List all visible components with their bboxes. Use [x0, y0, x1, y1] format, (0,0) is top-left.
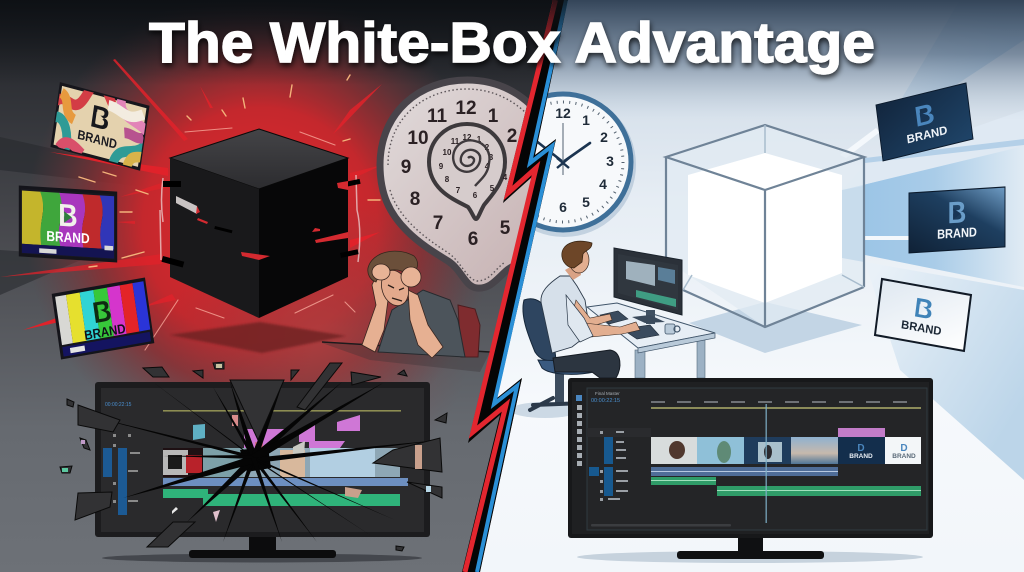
card: navy brand middle — [909, 187, 1005, 253]
clock numerals: 5 — [582, 194, 590, 210]
office chair — [523, 299, 595, 374]
stressed man at desk — [322, 251, 490, 372]
outer clock numerals: 11 — [427, 106, 447, 127]
inner clock numerals: 6 — [473, 191, 478, 200]
inner clock numerals: 2 — [485, 143, 490, 152]
outer clock numerals: 9 — [401, 157, 411, 178]
inner clock numerals: 12 — [463, 133, 472, 142]
inner clock numerals: 7 — [456, 186, 461, 195]
panel: white-box solution side — [470, 0, 1024, 572]
label: brand: BRAND — [46, 228, 90, 247]
label: brand: BRAND — [906, 124, 948, 147]
sparks around the black box — [79, 75, 380, 350]
inner clock numerals: 8 — [445, 175, 450, 184]
timeline: audio tracks — [163, 478, 408, 506]
icon: brand logo: B — [88, 99, 112, 138]
video clips: D — [900, 443, 908, 454]
outer clock numerals: 6 — [468, 229, 478, 250]
icon: brand logo: B — [913, 97, 936, 133]
outer clock numerals — [401, 98, 517, 250]
playhead — [766, 404, 767, 523]
track headers — [587, 428, 628, 501]
inner clock numerals: 5 — [490, 184, 495, 193]
timeline: left controls: 00:00:22:15 — [105, 402, 132, 408]
shirt — [541, 276, 590, 353]
outer clock numerals: 5 — [500, 218, 511, 239]
icon: brand logo: B — [90, 294, 114, 330]
timecode and sequence name — [591, 392, 620, 402]
label: brand: BRAND — [83, 321, 127, 343]
clock numerals: 6 — [559, 199, 567, 215]
video clips: BRAND — [892, 453, 916, 460]
timecode and sequence name: 00:00:22:15 — [591, 398, 620, 404]
audio tracks — [651, 467, 921, 496]
cube shadow — [689, 302, 862, 353]
red energy rays — [0, 59, 382, 330]
outer clock numerals: 2 — [507, 126, 517, 147]
label: brand: BRAND — [900, 319, 942, 338]
desktop monitor — [614, 248, 682, 324]
small screen shards with image fragments — [172, 415, 362, 522]
glitch lines around cube — [160, 175, 360, 262]
arms — [574, 300, 612, 324]
screen cracks radiating from impact — [90, 382, 440, 542]
label: brand: BRAND — [76, 127, 118, 152]
inner clock numerals — [439, 133, 508, 200]
desk — [587, 303, 715, 378]
head — [562, 241, 592, 280]
video clips — [651, 437, 921, 464]
outer clock numerals: 12 — [455, 98, 477, 119]
scrollbar — [591, 524, 731, 526]
clock numerals: 2 — [600, 129, 608, 145]
shadow under black box — [170, 322, 346, 353]
timeline: pink clips — [244, 415, 360, 448]
timecode and sequence name: Final Master — [595, 391, 620, 396]
card: white brand bottom — [875, 279, 971, 351]
inner clock numerals: 3 — [489, 153, 494, 162]
inner clock numerals: 4 — [503, 173, 508, 182]
icon: brand logo: B — [58, 198, 78, 234]
coffee mug — [665, 324, 680, 334]
dark glass wedges — [60, 362, 447, 551]
video clips: BRAND — [849, 453, 873, 460]
icon: glitching black box cube — [161, 129, 361, 318]
outer clock numerals: 7 — [433, 213, 443, 234]
outer clock numerals: 8 — [410, 189, 420, 210]
clean editing monitor — [568, 378, 933, 559]
outer clock numerals: 1 — [488, 106, 499, 127]
title: The White-Box Advantage — [149, 11, 875, 75]
icon: brand logo: B — [948, 195, 966, 231]
inner clock numerals: 11 — [451, 137, 460, 146]
clock numerals: 12 — [555, 105, 571, 121]
timeline: ruler — [163, 410, 401, 412]
card: bright glitch colour bars brand — [53, 279, 153, 358]
ruler — [651, 401, 921, 409]
timeline: video clips — [163, 448, 400, 477]
shattered editing monitor — [60, 362, 447, 562]
lightning divider — [462, 0, 568, 572]
outer clock numerals: 10 — [407, 128, 429, 149]
card: static colour bars brand — [20, 187, 116, 261]
shadow under clean monitor — [577, 551, 923, 563]
clock numerals — [555, 105, 614, 215]
clock numerals: 3 — [606, 153, 614, 169]
light beams — [846, 36, 1024, 480]
inner clock numerals: 9 — [439, 162, 444, 171]
editor at desk — [510, 241, 715, 418]
inner clock numerals: 10 — [443, 148, 452, 157]
inner clock numerals: 4 — [485, 162, 490, 171]
label: brand: BRAND — [937, 224, 977, 242]
icon: transparent white box cube — [666, 125, 864, 327]
inner clock numerals: 1 — [477, 135, 482, 144]
panel: black-box problem side — [0, 0, 556, 572]
tool column — [576, 395, 582, 466]
video clips: D — [857, 443, 865, 454]
clock numerals: 1 — [582, 112, 590, 128]
pink title clip — [838, 428, 885, 437]
timeline: left controls — [103, 402, 140, 515]
card: swirl glitch brand — [50, 82, 150, 171]
icon: wall clock on time — [535, 92, 636, 237]
keyboard and mouse pad — [622, 325, 659, 339]
clock numerals: 4 — [599, 176, 607, 192]
icon: melting spiral clock — [380, 80, 558, 288]
icon: brand logo: B — [913, 292, 935, 326]
card: navy brand top — [876, 83, 973, 161]
